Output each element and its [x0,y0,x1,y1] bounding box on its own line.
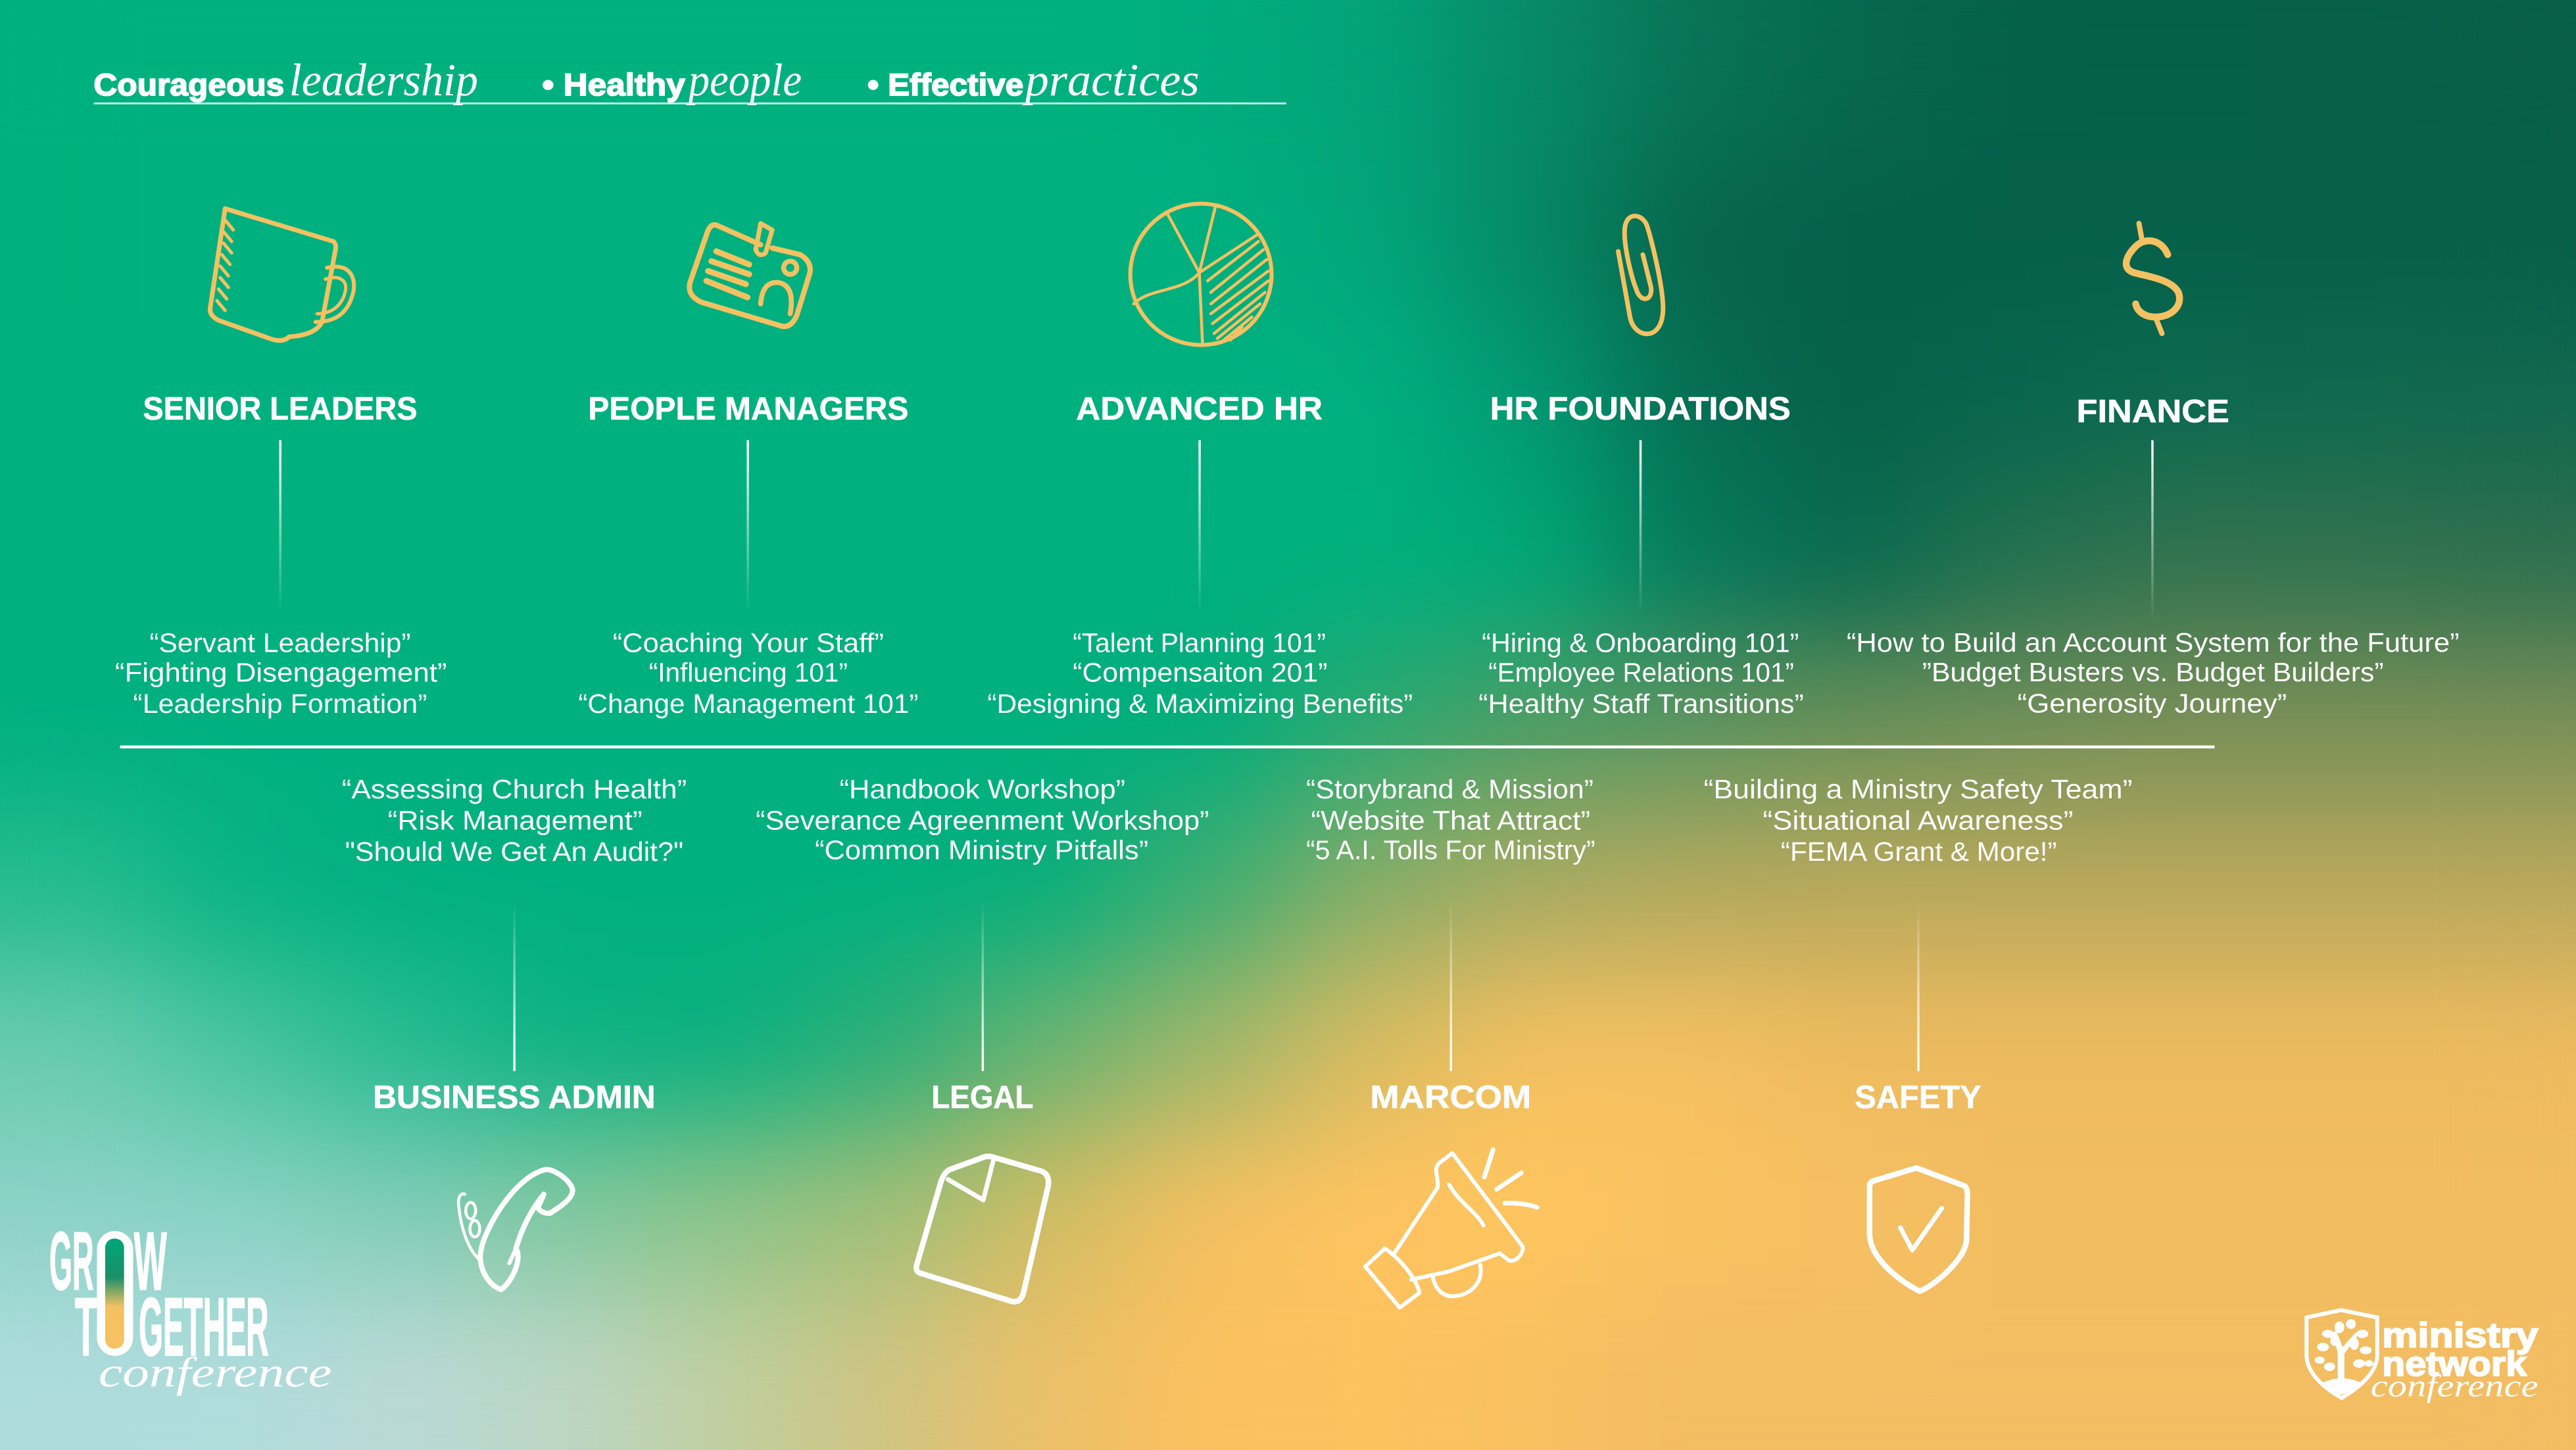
session list [987,628,1413,719]
tagline: courageous leadership: leadership [289,55,478,106]
heading: advanced hr: ADVANCED HR [1076,391,1323,427]
session list [1847,627,2460,718]
session list: “Building a Ministry Safety Team” [1703,774,2132,804]
session list [1478,628,1804,719]
logo: ministry network conference [2306,1310,2538,1403]
connector line [1450,900,1452,1071]
session list: ”Budget Busters vs. Budget Builders” [1922,657,2384,687]
icon: telephone [458,1169,573,1290]
icon: document [916,1157,1048,1302]
logo: grow together conference: T [75,1282,97,1373]
session list: "Should We Get An Audit?" [345,836,683,867]
session list: “Common Ministry Pitfalls” [815,834,1148,865]
heading: safety: SAFETY [1855,1080,1981,1115]
tagline: healthy people: • Healthy [542,68,685,103]
panel: advanced hr [987,204,1413,719]
heading: business admin: BUSINESS ADMIN [373,1080,656,1115]
icon: pie chart [1130,204,1272,345]
session list [578,628,918,719]
connector line [746,440,749,613]
logo: grow together conference: W [134,1216,167,1307]
session list [342,774,687,867]
heading: hr foundations: HR FOUNDATIONS [1490,391,1791,427]
icon: dollar sign [2126,224,2179,333]
icon: id badge [689,224,810,326]
tagline: courageous leadership: Courageous [93,68,284,103]
heading: legal: LEGAL [931,1080,1033,1115]
session list: “Situational Awareness” [1762,805,2074,835]
session list [1703,774,2132,867]
tagline: healthy people [542,55,802,106]
icon: megaphone [1365,1150,1537,1307]
session list: “5 A.I. Tolls For Ministry” [1306,834,1595,865]
session list: “Designing & Maximizing Benefits” [987,689,1413,719]
panel: people managers [578,224,918,719]
session list: “Compensaiton 201” [1073,658,1327,688]
session list: “Employee Relations 101” [1488,658,1794,688]
panel: safety [1703,774,2132,1291]
session list: “FEMA Grant & More!” [1781,836,2057,867]
session list: “Influencing 101” [649,658,848,688]
tagline: courageous leadership [93,55,478,106]
session list: “Change Management 101” [578,689,918,719]
connector line [1198,440,1201,613]
session list: “Fighting Disengagement” [115,658,447,688]
session list: “Storybrand & Mission” [1306,774,1593,804]
icon: coffee mug [210,208,354,341]
panel: hr foundations [1478,216,1804,719]
connector line [279,440,281,613]
logo: ministry network conference: ministry [2382,1317,2538,1355]
heading: finance: FINANCE [2077,394,2229,429]
session list: “Hiring & Onboarding 101” [1482,628,1799,658]
logo: grow together conference: conference [99,1349,332,1396]
tagline header [93,55,1286,106]
heading: marcom: MARCOM [1370,1080,1531,1115]
heading: senior leaders: SENIOR LEADERS [143,391,418,427]
connector line [1640,440,1641,613]
tagline: effective practices [867,55,1200,106]
connector line [2151,440,2154,621]
session list: “Risk Management” [388,805,643,835]
session list: “How to Build an Account System for the Future” [1847,627,2460,658]
logo: grow together conference: GR [49,1216,93,1307]
panel: business admin [342,774,687,1290]
logo: grow together conference: GETHER [139,1282,268,1373]
session list [115,628,447,719]
icon: paperclip [1618,216,1663,334]
panel: senior leaders [115,208,447,719]
session list: “Website That Attract” [1311,805,1590,835]
heading: people managers: PEOPLE MANAGERS [588,391,908,427]
shield with tree [2306,1310,2377,1398]
tagline: effective practices: • Effective [867,68,1023,103]
session list [1306,774,1595,865]
tagline: effective practices: practices [1022,55,1200,106]
session list: “Generosity Journey” [2018,688,2287,718]
connector line [513,900,516,1071]
panel: marcom [1306,774,1595,1307]
session list: “Severance Agreenment Workshop” [756,805,1209,835]
connector line [1917,900,1920,1071]
session list: “Coaching Your Staff” [613,628,884,658]
panel: finance [1847,224,2460,718]
logo: grow together conference [49,1216,332,1396]
session list: “Handbook Workshop” [840,774,1125,804]
connector line [982,900,984,1071]
session list: “Talent Planning 101” [1073,628,1326,658]
session list: “Leadership Formation” [133,689,427,719]
panel: legal [756,774,1209,1302]
session list: “Servant Leadership” [149,628,411,658]
session list [756,774,1209,865]
session list: “Healthy Staff Transitions” [1478,689,1804,719]
session list: “Assessing Church Health” [342,774,687,804]
logo: ministry network conference: network [2382,1345,2527,1384]
tagline: healthy people: people [685,55,802,106]
icon: shield with check [1870,1168,1968,1291]
logo: ministry network conference: conference [2371,1369,2538,1403]
